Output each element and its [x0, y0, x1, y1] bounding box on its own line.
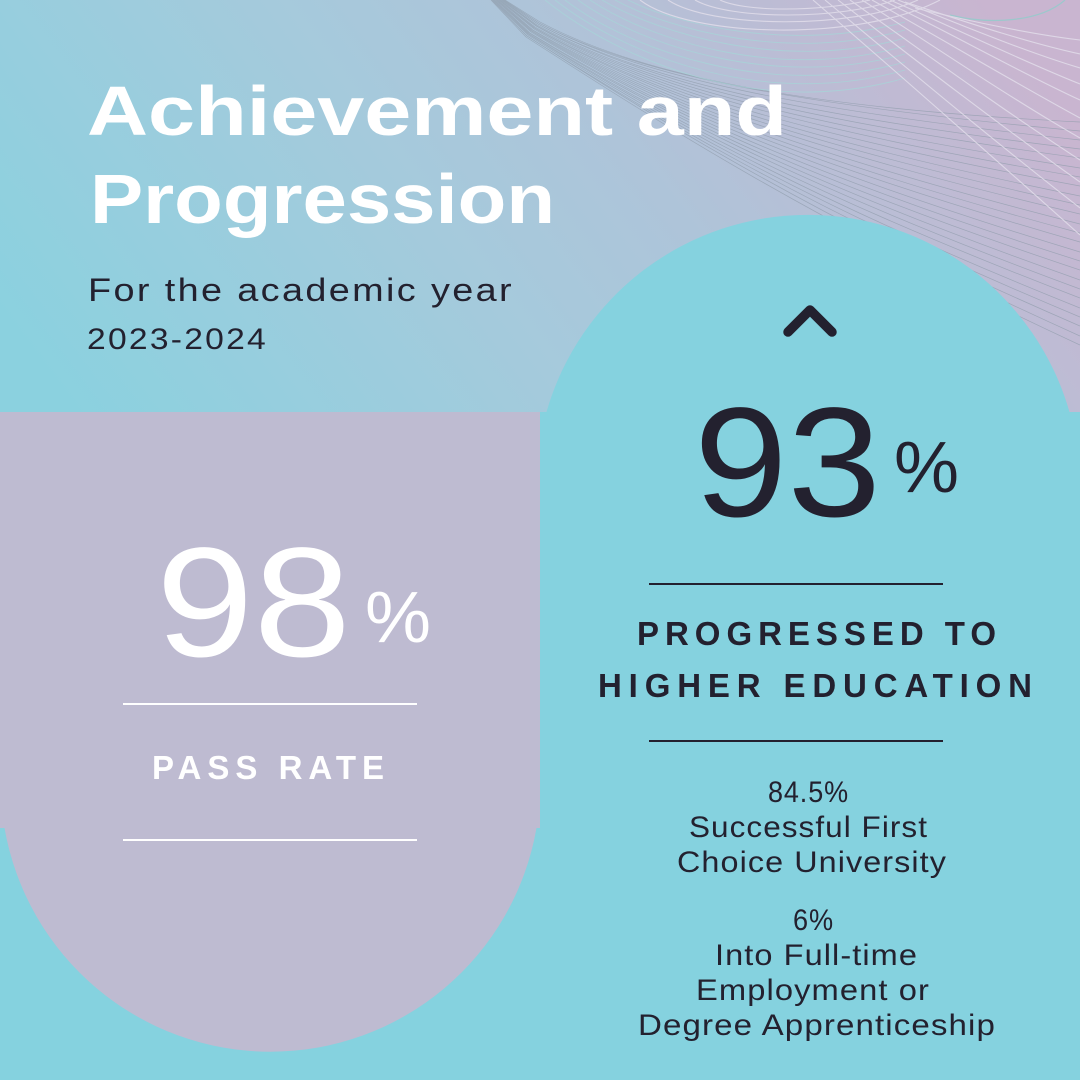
subtitle: 2023-2024 [87, 323, 268, 356]
detail: employment or apprenticeship: Into Full-time [715, 939, 918, 972]
blue dome shape [546, 215, 1070, 412]
stat: 98 percent: % [365, 578, 431, 658]
detail: first choice university: 84.5% [768, 776, 849, 809]
detail: employment or apprenticeship: Employment or [696, 974, 930, 1007]
stat: 98 percent: 98 [156, 516, 351, 690]
label: progressed to higher education [598, 583, 1032, 742]
stat: 98 percent [156, 516, 431, 690]
lilac arch shape [0, 412, 540, 1052]
icon: up chevron [788, 310, 832, 332]
header background gradient [0, 0, 1080, 412]
subtitle [87, 272, 514, 356]
stat: 93 percent: 93 [694, 376, 881, 550]
title: Achievement and [87, 72, 787, 150]
detail: employment or apprenticeship: 6% [793, 904, 834, 937]
decorative line waves [491, 0, 1080, 345]
detail: employment or apprenticeship: Degree Apprenticeship [638, 1009, 996, 1042]
subtitle: For the academic year [88, 272, 514, 308]
detail: first choice university: Choice University [677, 846, 947, 879]
stat: 93 percent: % [894, 428, 959, 508]
label: progressed to higher education: HIGHER EDUCATION [598, 667, 1032, 704]
label: pass rate: PASS RATE [152, 749, 384, 786]
panel: pass rate [0, 412, 540, 1052]
title: Progression [90, 160, 555, 238]
teal corner arc [950, 0, 1065, 20]
label: progressed to higher education: PROGRESSED TO [637, 615, 996, 652]
detail: employment or apprenticeship [638, 904, 996, 1042]
detail: first choice university [677, 776, 947, 879]
panel: higher education progression [598, 310, 1032, 1042]
detail: first choice university: Successful First [689, 811, 928, 844]
title [87, 72, 787, 238]
stat: 93 percent [694, 376, 959, 550]
